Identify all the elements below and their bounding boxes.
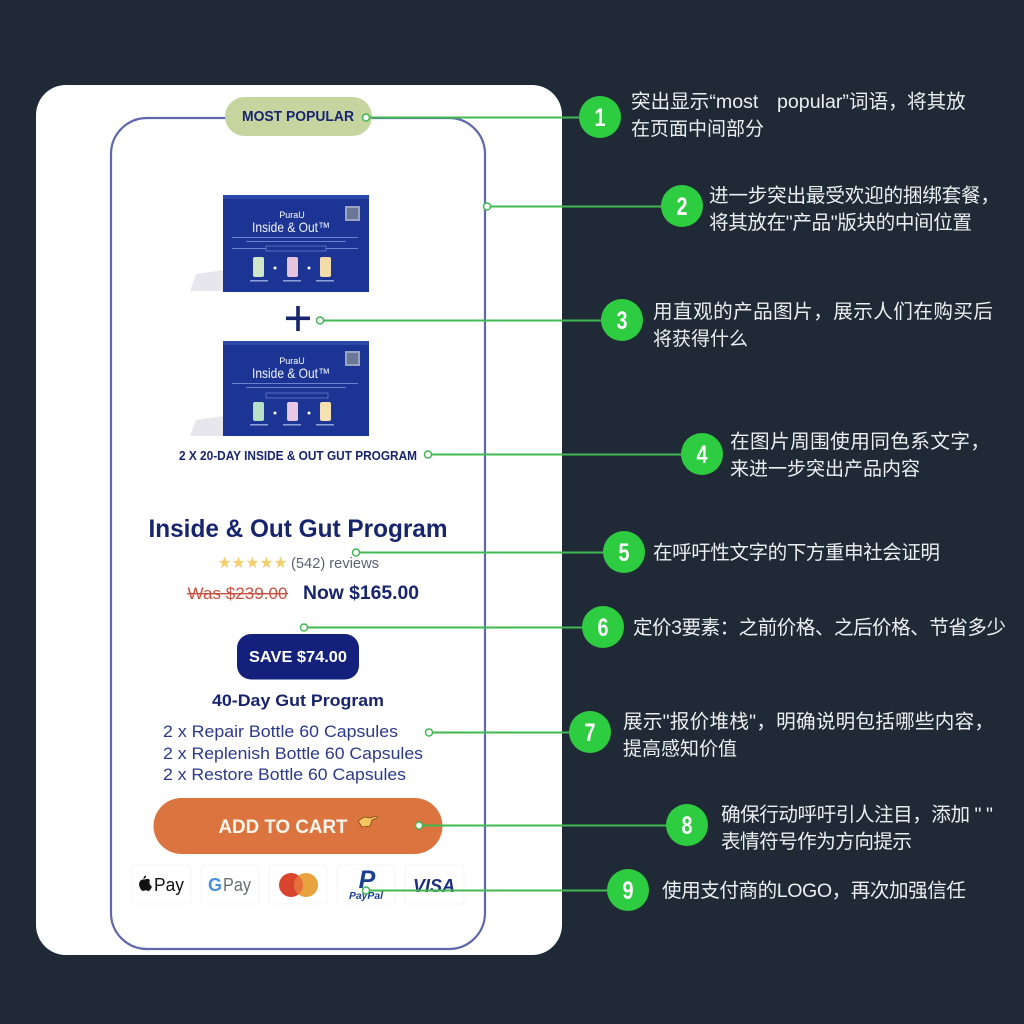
- callout 7: [426, 711, 994, 760]
- payment logos: [132, 865, 464, 904]
- callout 4: 4: [696, 441, 708, 469]
- paypal: PayPal: [349, 890, 384, 902]
- google pay: Pay: [223, 875, 251, 895]
- callout 3: 将获得什么: [653, 328, 748, 350]
- google pay: [201, 865, 259, 904]
- callout 5: [352, 531, 940, 573]
- callout 5: 在呼吁性文字的下方重申社会证明: [653, 542, 940, 564]
- paypal: P: [359, 866, 376, 894]
- most popular tag: MOST POPULAR: [242, 109, 355, 125]
- review count: (542) reviews: [291, 556, 379, 572]
- callout 8: 表情符号作为方向提示: [721, 831, 912, 853]
- product image: box two: [190, 341, 369, 436]
- callout 8: 8: [682, 812, 693, 840]
- callout 8: 确保行动呼吁引人注目，添加 " ": [721, 804, 993, 826]
- callout 6: [300, 606, 1006, 648]
- product image: box two: Inside & Out™: [252, 365, 330, 381]
- callout 1: 将其放: [907, 91, 966, 113]
- callout 3: 3: [616, 307, 628, 335]
- callout 9: [362, 869, 966, 911]
- contents list: 2 x Restore Bottle 60 Capsules: [163, 766, 406, 784]
- callout 7: 提高感知价值: [623, 738, 737, 760]
- callout 2: 2: [676, 193, 688, 221]
- paypal: [337, 865, 395, 904]
- callout 2: [484, 185, 1000, 234]
- callout 5: 5: [618, 539, 630, 567]
- program subtitle: 40-Day Gut Program: [212, 692, 384, 710]
- icon: pointing hand: [358, 816, 377, 827]
- callout 6: 6: [598, 614, 608, 642]
- callout 1: popular”词语，: [777, 91, 908, 113]
- add to cart button: [154, 798, 442, 854]
- contents list: [163, 723, 423, 784]
- callout 1: 在页面中间部分: [631, 118, 764, 140]
- callout 3: 用直观的产品图片，展示人们在购买后: [653, 301, 993, 323]
- rating stars: ★★★★★: [218, 553, 288, 572]
- product image: box two: PuraU: [279, 356, 305, 366]
- contents list: 2 x Replenish Bottle 60 Capsules: [163, 745, 423, 763]
- callout 9: 使用支付商的LOGO，再次加强信任: [662, 880, 966, 902]
- save badge: SAVE $74.00: [249, 649, 347, 666]
- product title: Inside & Out Gut Program: [148, 515, 448, 543]
- callout 3: [316, 299, 993, 350]
- apple pay: [132, 865, 191, 904]
- panel: bundle outline: [111, 118, 485, 949]
- visa: [405, 865, 464, 904]
- callout 4: 来进一步突出产品内容: [730, 458, 920, 480]
- callout 9: 9: [622, 877, 634, 905]
- save badge: [237, 634, 359, 680]
- old price: Was $239.00: [188, 584, 288, 603]
- contents list: 2 x Repair Bottle 60 Capsules: [163, 723, 398, 741]
- product image: box one: [190, 195, 369, 292]
- product caption: 2 X 20-DAY INSIDE & OUT GUT PROGRAM: [179, 449, 417, 463]
- product image: box one: Inside & Out™: [252, 219, 330, 235]
- visa: VISA: [413, 876, 455, 896]
- callout 1: 1: [594, 104, 606, 132]
- google pay: G: [208, 875, 222, 895]
- callout 1: [362, 91, 966, 140]
- callout 1: 突出显示“most: [631, 91, 759, 113]
- most popular tag: [225, 97, 372, 136]
- apple pay: Pay: [154, 874, 185, 895]
- panel: product card: [36, 85, 562, 955]
- callout 2: 将其放在"产品"版块的中间位置: [709, 212, 972, 234]
- icon: plus: [286, 306, 310, 331]
- callout 7: 展示"报价堆栈"，明确说明包括哪些内容，: [623, 711, 994, 733]
- mastercard: [269, 865, 327, 904]
- callout 6: 定价3要素：之前价格、之后价格、节省多少: [633, 617, 1006, 639]
- callout 8: [416, 804, 993, 853]
- callout 4: [424, 431, 990, 480]
- callout 2: 进一步突出最受欢迎的捆绑套餐，: [709, 185, 1000, 207]
- callout 7: 7: [584, 719, 596, 747]
- add to cart button: ADD TO CART: [218, 816, 348, 838]
- new price: Now $165.00: [303, 583, 419, 604]
- product image: box one: PuraU: [279, 210, 305, 220]
- callout 4: 在图片周围使用同色系文字，: [730, 431, 990, 453]
